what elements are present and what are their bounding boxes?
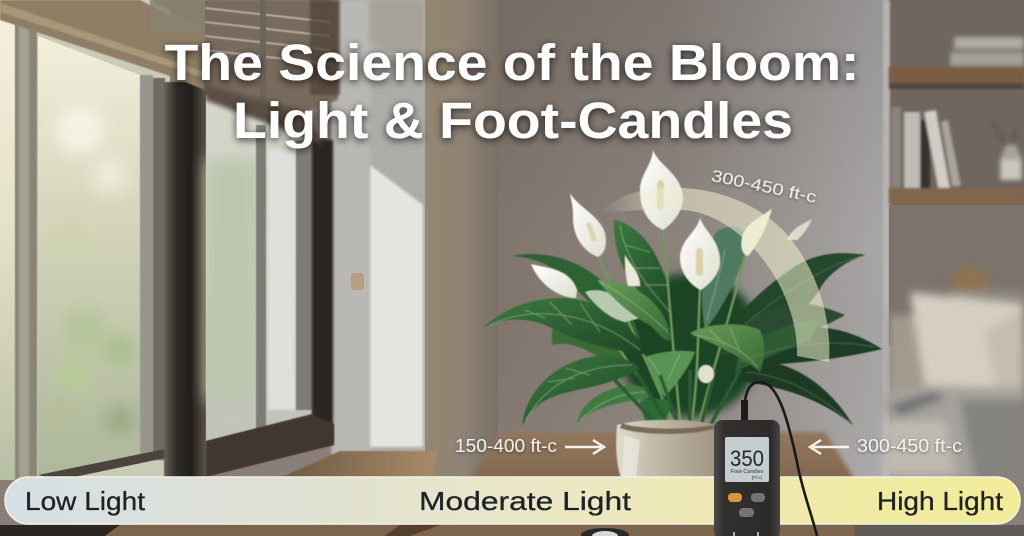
- title: The Science of the Bloom:: [164, 34, 860, 91]
- leaf veins: [490, 225, 758, 420]
- window blinds: [0, 0, 340, 145]
- plant pot: [616, 420, 716, 478]
- meter screen: (Ft-c): [752, 475, 763, 480]
- peace lily flower: far right: [787, 219, 812, 240]
- wooden table: [405, 432, 855, 536]
- foot-candle meter: [714, 400, 780, 536]
- peace lily flower: right: [741, 208, 772, 256]
- peace lily flower: centre: [680, 218, 720, 290]
- shelf unit: [883, 0, 1024, 480]
- books stacked on top shelf: [950, 37, 1024, 66]
- peace lily flower: top: [640, 150, 683, 230]
- bottom strip below the bar: [0, 525, 1024, 536]
- peace lily flower: far left: [531, 264, 577, 298]
- arc label: 300-450 ft-c: [710, 166, 819, 207]
- window right pane: [206, 95, 334, 477]
- light scale bar: [5, 477, 1020, 524]
- dense leaf mass: [618, 273, 762, 417]
- window dark centre frame: [164, 82, 206, 477]
- stems: [577, 228, 745, 420]
- left range label and arrow: 150-400 ft-c: [455, 436, 557, 456]
- title: Light & Foot-Candles: [233, 92, 793, 149]
- label: low light: Low Light: [25, 486, 146, 516]
- meter screen: [725, 437, 769, 482]
- right range label and arrow: [810, 436, 962, 456]
- back leaves: [512, 220, 882, 425]
- small white spathes: [625, 255, 714, 383]
- label: moderate light: Moderate Light: [419, 486, 632, 516]
- title: [164, 34, 860, 149]
- window left pane: [0, 0, 170, 480]
- mid leaves: [483, 280, 820, 440]
- meter screen: Foot-Candles: [730, 469, 764, 475]
- peace lily flower: left: [570, 193, 606, 257]
- right range label and arrow: 300-450 ft-c: [857, 436, 962, 456]
- meter cable: [745, 382, 817, 536]
- blurred sofa: [884, 267, 1024, 480]
- window side wall with sunlight patch: [332, 0, 425, 455]
- plant: [483, 150, 882, 440]
- meter screen: 350: [730, 446, 764, 471]
- window sill: [282, 451, 437, 477]
- left range label and arrow: [455, 436, 604, 456]
- stem cluster above pot: [610, 370, 740, 430]
- light arc: [600, 188, 829, 362]
- vase on shelf: [992, 120, 1022, 180]
- books on second shelf: [891, 107, 961, 188]
- label: high light: High Light: [877, 486, 1004, 516]
- meter buttons: [728, 493, 765, 536]
